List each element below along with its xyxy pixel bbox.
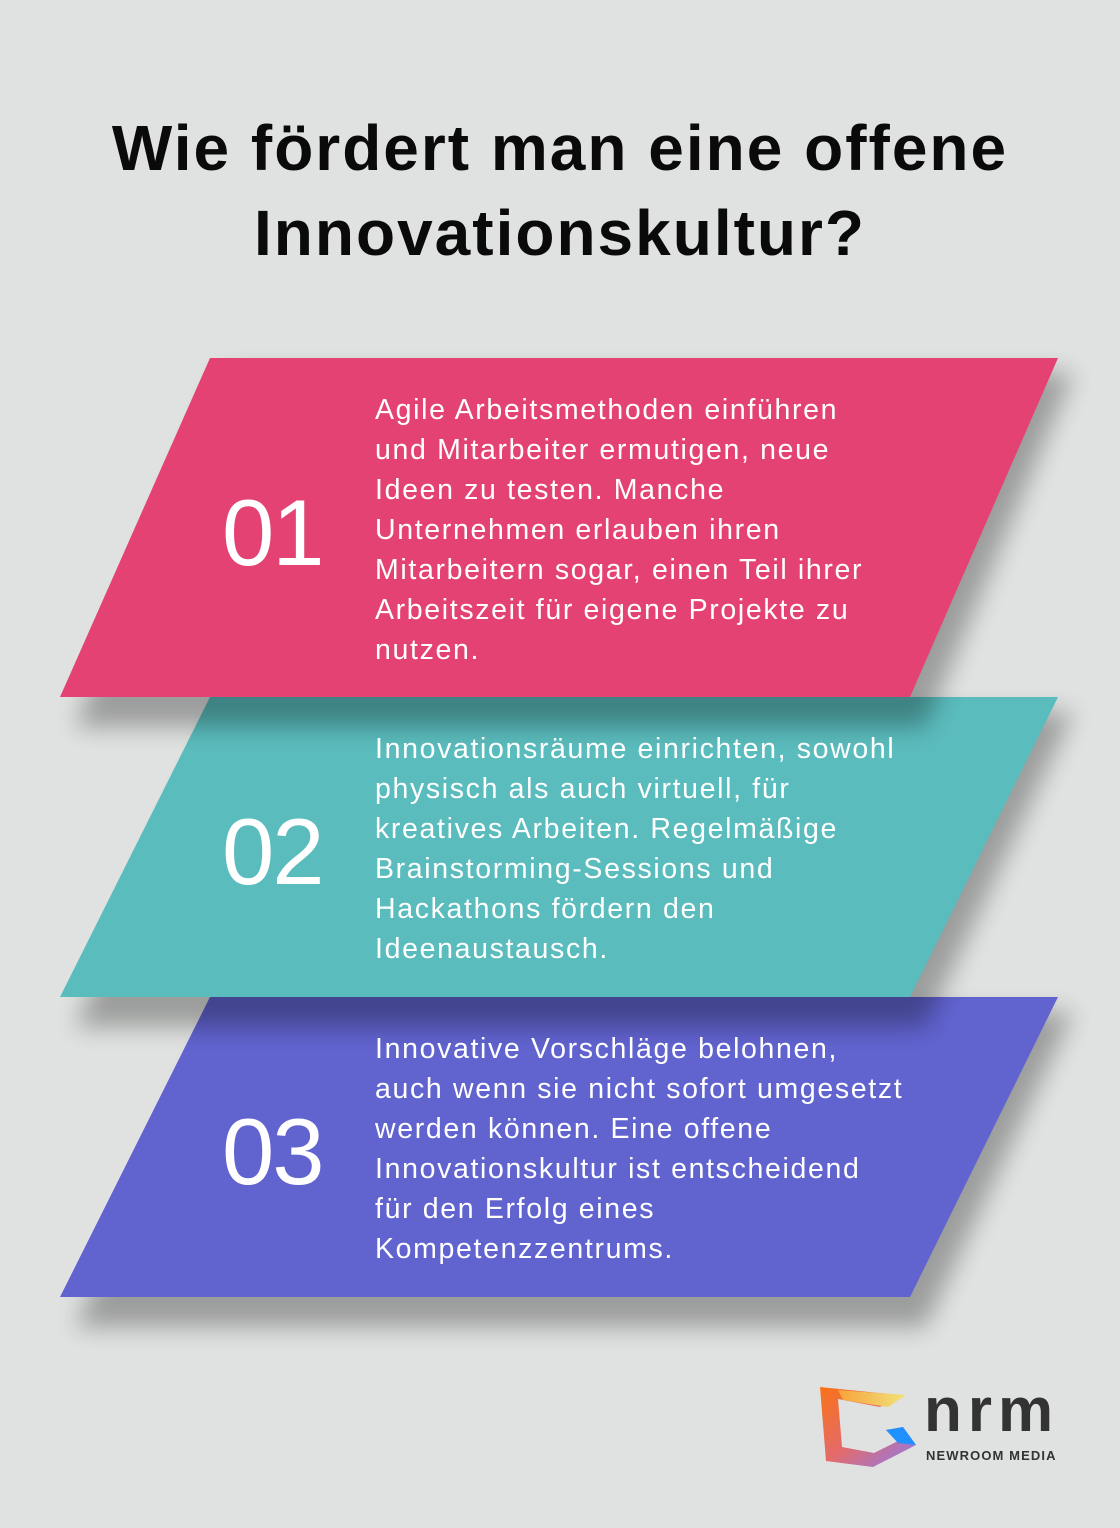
text 3: Innovative Vorschläge belohnen, xyxy=(375,1033,838,1065)
text 3: für den Erfolg eines xyxy=(375,1193,655,1225)
text 2: Ideenaustausch. xyxy=(375,933,609,965)
number 01: 01 xyxy=(222,480,323,585)
number 03: 03 xyxy=(222,1099,323,1204)
text 1: Agile Arbeitsmethoden einführen xyxy=(375,394,838,426)
text 1 xyxy=(375,394,863,666)
text 3 xyxy=(375,1033,903,1265)
text 2 xyxy=(375,733,895,965)
text 2: Hackathons fördern den xyxy=(375,893,716,925)
text 1: Arbeitszeit für eigene Projekte zu xyxy=(375,594,849,626)
text 1: und Mitarbeiter ermutigen, neue xyxy=(375,434,830,466)
number 02: 02 xyxy=(222,799,323,904)
logo icon xyxy=(820,1387,916,1467)
text 1: Unternehmen erlauben ihren xyxy=(375,514,781,546)
logo xyxy=(820,1376,1059,1467)
text 3: auch wenn sie nicht sofort umgesetzt xyxy=(375,1073,903,1105)
panel 1 xyxy=(222,394,863,666)
text 1: Mitarbeitern sogar, einen Teil ihrer xyxy=(375,554,863,586)
title xyxy=(112,112,1008,269)
text 3: Innovationskultur ist entscheidend xyxy=(375,1153,860,1185)
text 2: Innovationsräume einrichten, sowohl xyxy=(375,733,895,765)
panel shape 1 xyxy=(60,358,1058,697)
logo: NEWROOM MEDIA xyxy=(926,1448,1057,1463)
text 2: physisch als auch virtuell, für xyxy=(375,773,790,805)
panel 3 xyxy=(222,1033,903,1265)
text 1: Ideen zu testen. Manche xyxy=(375,474,725,506)
text 3: Kompetenzzentrums. xyxy=(375,1233,674,1265)
text 2: kreatives Arbeiten. Regelmäßige xyxy=(375,813,838,845)
panel 2 xyxy=(222,733,895,965)
text 2: Brainstorming-Sessions und xyxy=(375,853,774,885)
panel shape 3 xyxy=(60,997,1058,1297)
title: Wie fördert man eine offene xyxy=(112,112,1008,184)
logo text: nrm xyxy=(924,1376,1059,1445)
text 1: nutzen. xyxy=(375,634,480,666)
text 3: werden können. Eine offene xyxy=(375,1113,772,1145)
title: Innovationskultur? xyxy=(254,197,866,269)
panel shape 2 xyxy=(60,697,1058,997)
